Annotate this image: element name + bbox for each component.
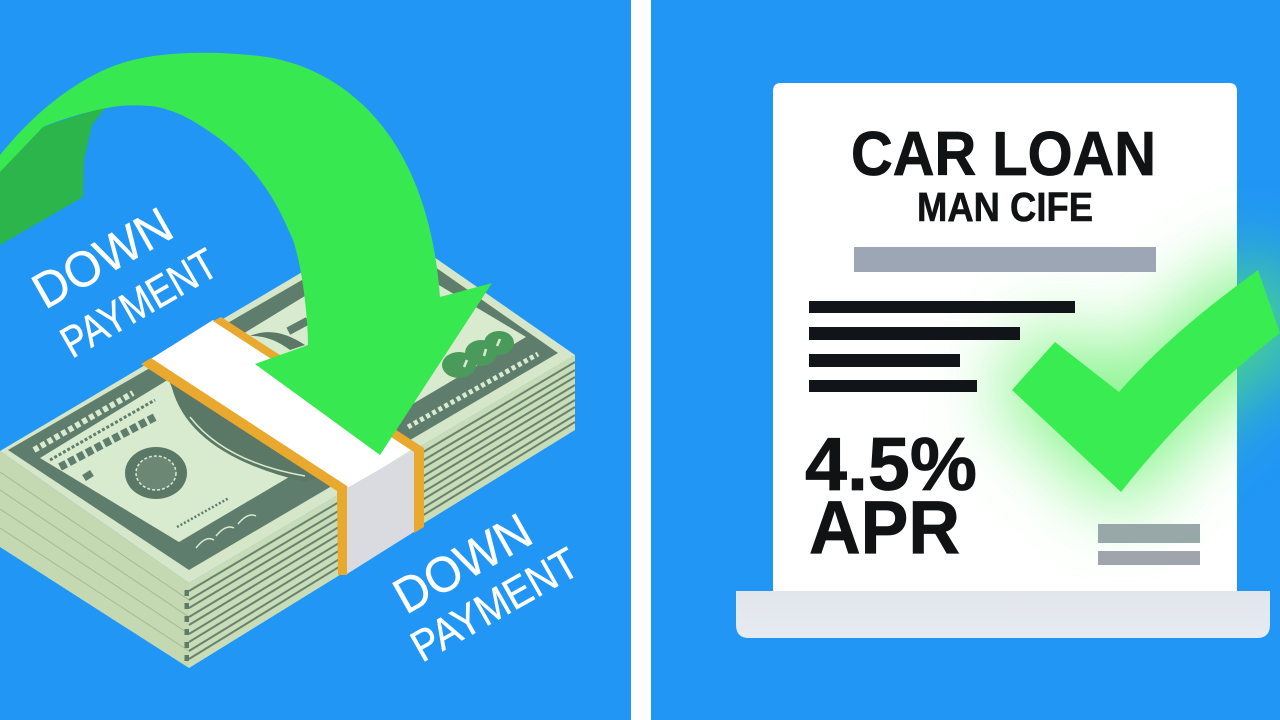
top bill face [0, 223, 575, 583]
bill seal [125, 447, 187, 499]
document paper [773, 83, 1237, 592]
label: down payment upper [23, 196, 226, 368]
portrait oval [168, 378, 325, 482]
icon: green check mark [1012, 270, 1280, 492]
document: loan approval [736, 83, 1280, 638]
text: DOWN: DOWN [23, 196, 182, 320]
paper band top [149, 320, 414, 488]
stack left side [0, 451, 189, 668]
orange stripe right [213, 317, 424, 533]
icon: curved green arrow [0, 53, 492, 455]
bill script row [34, 393, 133, 450]
bill lower text row [408, 354, 538, 427]
signature bars [1098, 524, 1200, 565]
panel: car loan background [651, 0, 1280, 720]
label: down payment lower [384, 502, 587, 672]
bill inner panel [40, 250, 526, 542]
text: PAYMENT: PAYMENT [403, 538, 587, 672]
check glow [1012, 270, 1280, 492]
arrow body and head [0, 53, 492, 455]
illustration: stack of cash [0, 223, 575, 668]
document tray [736, 591, 1270, 638]
orange stripe left [141, 358, 347, 575]
APR label: APR [809, 485, 960, 569]
bill serial rows [50, 400, 155, 460]
interest rate: 4.5% [805, 422, 977, 506]
text placeholder lines [809, 301, 1075, 392]
bill 100 mark right [442, 331, 514, 378]
divider [631, 0, 651, 720]
document title: CAR LOAN [851, 120, 1156, 189]
arrow tail shadow [0, 106, 107, 245]
text: PAYMENT: PAYMENT [52, 239, 226, 368]
document subtitle: MAN CIFE [917, 184, 1093, 230]
text: DOWN: DOWN [384, 502, 541, 625]
paper band side [347, 448, 417, 574]
panel: down payment background [0, 0, 631, 720]
bill 100 mark left [177, 498, 229, 527]
stack right side [189, 355, 575, 668]
grey heading bar [854, 247, 1156, 272]
